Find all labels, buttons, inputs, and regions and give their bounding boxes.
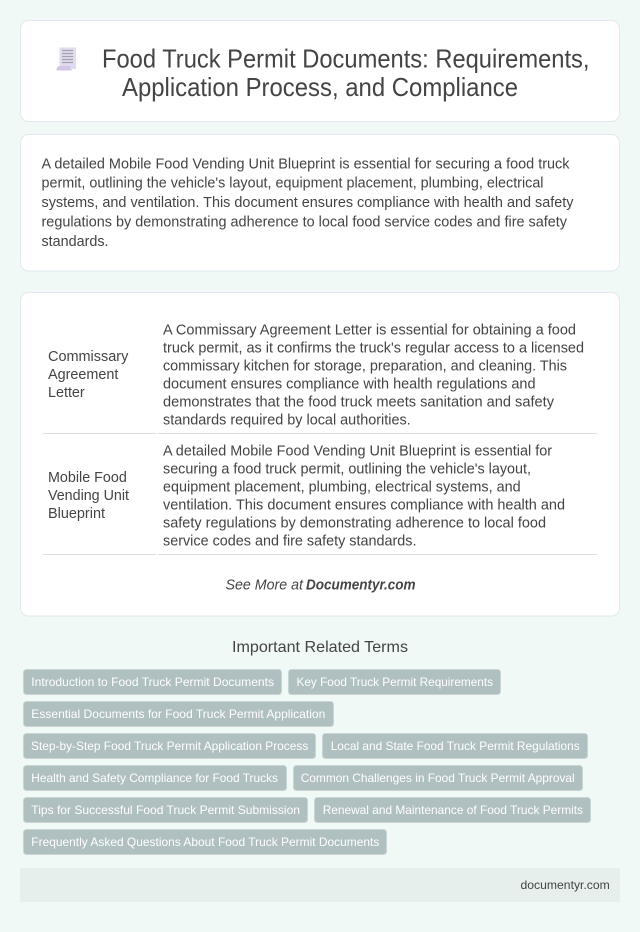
tag xyxy=(322,734,588,758)
footer xyxy=(20,868,620,902)
tag xyxy=(294,766,582,790)
tag: Frequently Asked Questions About Food Truck Permit Documents xyxy=(31,835,379,849)
tag: Essential Documents for Food Truck Permit Application xyxy=(31,707,325,721)
row description: service codes and fire safety standards. xyxy=(163,533,416,549)
row label: Letter xyxy=(48,385,85,401)
row description: truck permit, as it confirms the truck's regular access to a licensed xyxy=(163,340,584,356)
link: see more: Documentyr.com xyxy=(306,578,416,594)
row description xyxy=(163,322,584,428)
row description: equipment placement, plumbing, electrical systems, and xyxy=(163,479,521,495)
row description: A detailed Mobile Food Vending Unit Blueprint is essential for xyxy=(163,443,552,459)
tag: Local and State Food Truck Permit Regulations xyxy=(331,739,580,753)
panel: header xyxy=(20,20,620,122)
text block: introduction: regulations by demonstrating adherence to local food service codes and fire safety xyxy=(42,215,568,231)
row label: Commissary xyxy=(48,349,129,365)
row label: Mobile Food xyxy=(48,470,127,486)
tag: Common Challenges in Food Truck Permit Approval xyxy=(301,771,575,785)
text block: introduction: permit, outlining the vehicle's layout, equipment placement, plumbing, electrical xyxy=(42,176,544,192)
tag: Tips for Successful Food Truck Permit Submission xyxy=(31,803,300,817)
text block: introduction: standards. xyxy=(42,234,108,250)
tag xyxy=(24,766,286,790)
tag xyxy=(24,734,316,758)
link: see more xyxy=(226,578,416,594)
tag xyxy=(24,670,282,694)
table row: commissary agreement letter xyxy=(48,322,584,428)
text block: introduction xyxy=(42,156,574,250)
row description: commissary kitchen for storage, preparation, and cleaning. This xyxy=(163,358,567,374)
tag: Introduction to Food Truck Permit Documents xyxy=(31,675,274,689)
table row: mobile food vending unit blueprint xyxy=(48,443,565,549)
row description: safety regulations by demonstrating adherence to local food xyxy=(163,515,546,531)
link: see more: See More at xyxy=(226,578,304,594)
panel: document table xyxy=(20,292,620,616)
heading: important related terms: Important Related Terms xyxy=(232,639,408,656)
icon: document xyxy=(56,48,76,70)
title: Food Truck Permit Documents: Requirements, xyxy=(102,46,590,74)
row label: Vending Unit xyxy=(48,488,129,504)
tag: Step-by-Step Food Truck Permit Application Process xyxy=(31,739,308,753)
row label: Agreement xyxy=(48,367,118,383)
text block: introduction: A detailed Mobile Food Vending Unit Blueprint is essential for securing a food truck xyxy=(42,156,570,172)
row description: securing a food truck permit, outlining the vehicle's layout, xyxy=(163,461,531,477)
text block: introduction: systems, and ventilation. This document ensures compliance with health and safety xyxy=(42,195,574,211)
title xyxy=(102,46,590,102)
tag xyxy=(314,798,590,822)
row description xyxy=(163,443,565,549)
title: Application Process, and Compliance xyxy=(122,74,518,102)
row description: A Commissary Agreement Letter is essential for obtaining a food xyxy=(163,322,576,338)
tag: Renewal and Maintenance of Food Truck Permits xyxy=(323,803,583,817)
row description: demonstrates that the food truck meets sanitation and safety xyxy=(163,394,555,410)
tag xyxy=(24,830,386,854)
row description: standards required by local authorities. xyxy=(163,412,411,428)
row label xyxy=(48,349,129,401)
row description: document ensures compliance with health regulations and xyxy=(163,376,536,392)
panel: introduction xyxy=(20,134,620,271)
panel: related term tags xyxy=(24,670,590,854)
row label xyxy=(48,470,129,522)
tag xyxy=(24,702,334,726)
tag xyxy=(24,798,308,822)
tag xyxy=(288,670,500,694)
tag: Key Food Truck Permit Requirements xyxy=(296,675,493,689)
row description: ventilation. This document ensures compliance with health and xyxy=(163,497,565,513)
tag: Health and Safety Compliance for Food Trucks xyxy=(31,771,278,785)
row label: Blueprint xyxy=(48,506,105,522)
footer: documentyr.com xyxy=(520,878,610,892)
